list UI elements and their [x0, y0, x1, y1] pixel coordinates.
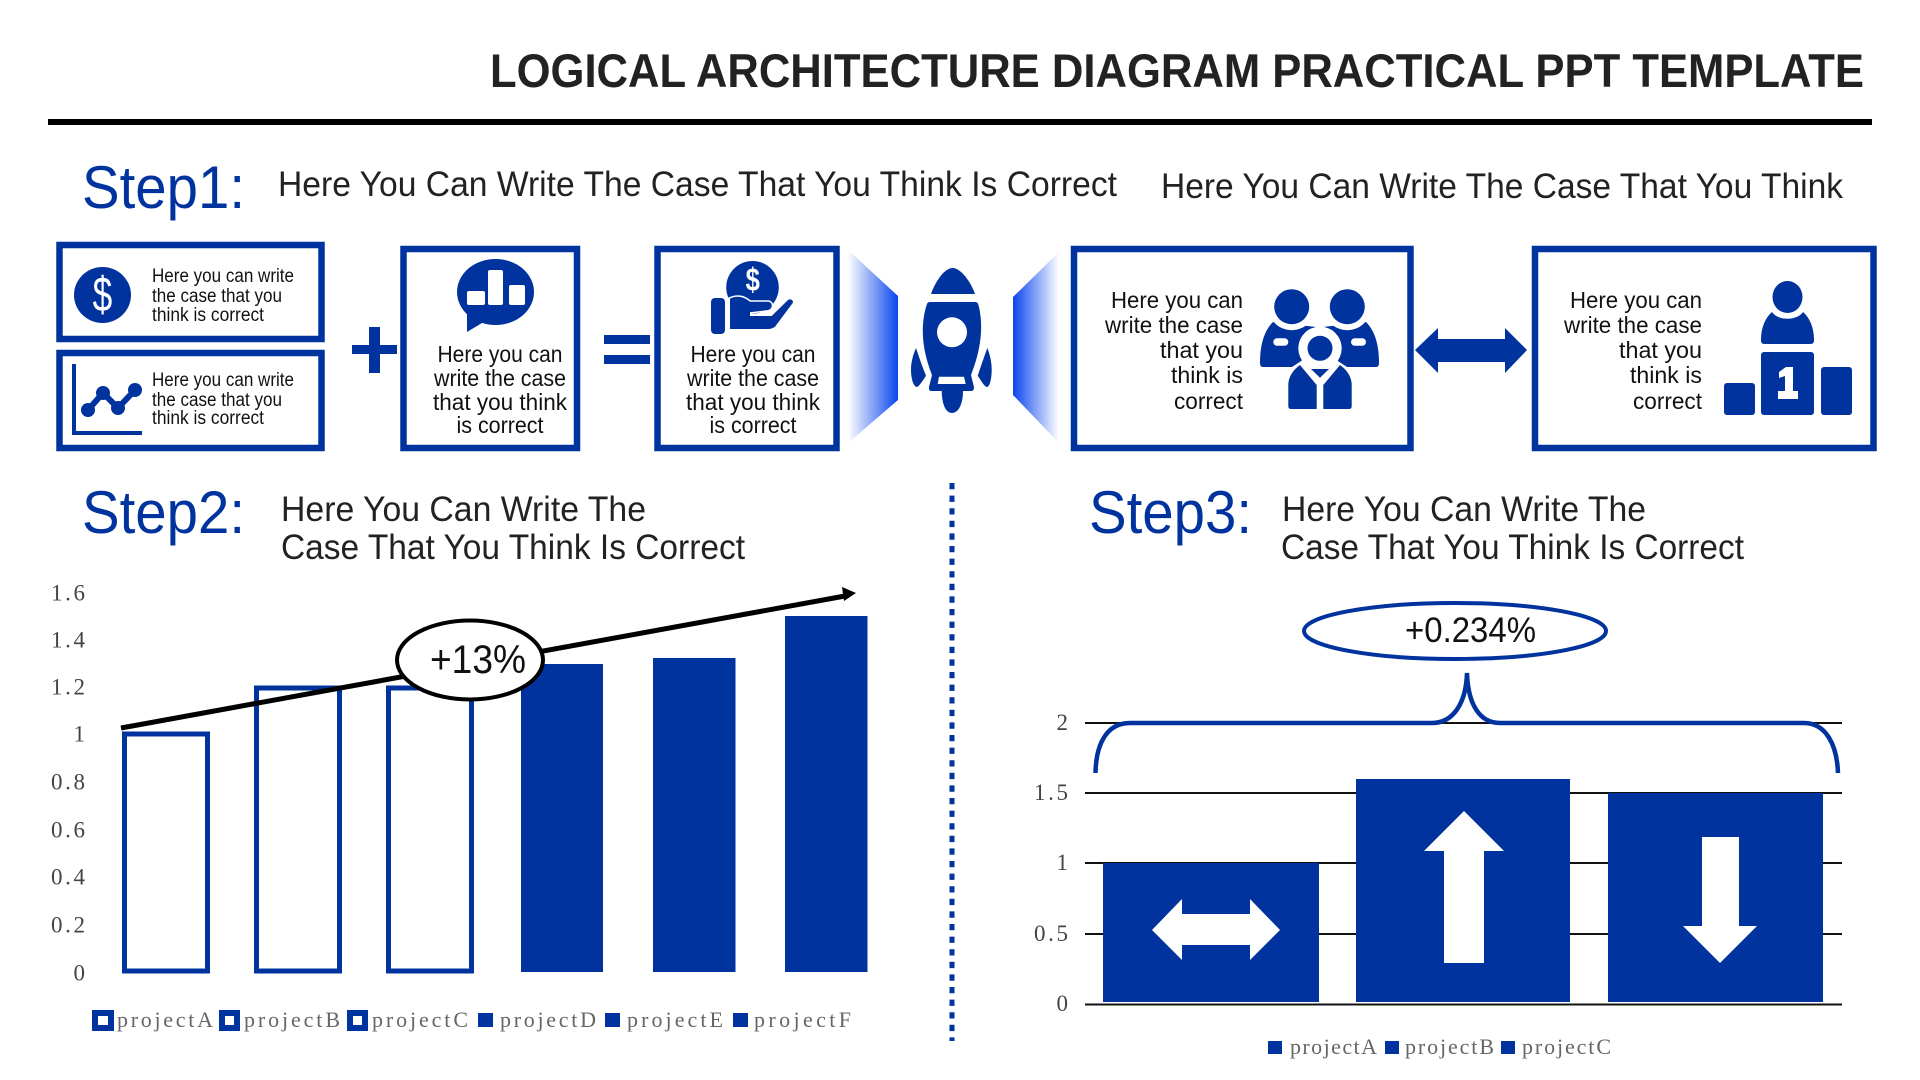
- icon: equals sign: [604, 335, 650, 364]
- heading: step 3: Step3:: [1089, 479, 1252, 546]
- right gradient trapezoid: [1013, 252, 1059, 443]
- icon: speech bubble with bars: [457, 259, 534, 332]
- legend: projectC: [372, 1007, 468, 1032]
- bar: right with down arrow: [1608, 793, 1823, 1002]
- panel: podium card: [1535, 249, 1874, 448]
- card text: Here you can: [1570, 287, 1702, 313]
- icon: rocket: [911, 268, 992, 413]
- panel: dollar card: [60, 245, 322, 339]
- card text: correct: [1174, 388, 1244, 414]
- y axis labels: 1: [1056, 850, 1068, 875]
- icon: team: [1260, 283, 1379, 409]
- step 2 description: Here You Can Write The: [281, 490, 646, 529]
- legend: projectD: [500, 1007, 596, 1032]
- icon: person on podium: [1724, 281, 1852, 415]
- card text: think is correct: [152, 305, 265, 326]
- card text: write the case: [686, 365, 819, 391]
- card text: that you think: [686, 389, 820, 415]
- card text: that you: [1619, 337, 1702, 363]
- card text: think is: [1171, 362, 1243, 388]
- y axis labels: 2: [1056, 710, 1068, 735]
- panel: speech bubble card: [404, 249, 577, 448]
- brace: [1096, 673, 1838, 773]
- callout: +0.234%: [1304, 603, 1606, 659]
- card text: Here you can write: [152, 266, 294, 287]
- card text: write the case: [433, 365, 566, 391]
- card text: the case that you: [152, 286, 282, 307]
- card text: the case that you: [152, 390, 282, 411]
- card text: write the case: [1563, 312, 1702, 338]
- step 1 description left: Here You Can Write The Case That You Think Is Correct: [278, 165, 1117, 204]
- y axis labels: 0.6: [51, 818, 85, 842]
- icon: dollar coin: $: [93, 267, 113, 322]
- y axis labels: 1.5: [1034, 780, 1068, 805]
- y axis labels: 1.6: [51, 580, 85, 606]
- card text: Here you can: [690, 341, 816, 367]
- bar chart: right: [1034, 603, 1842, 1059]
- legend: [95, 1007, 851, 1032]
- icon: dollar coin: [74, 267, 131, 323]
- card text: [152, 370, 294, 429]
- panel: line chart card: [60, 353, 322, 448]
- bars: [124, 616, 868, 972]
- card text: that you think: [433, 389, 567, 415]
- card text: Here you can write: [152, 370, 294, 391]
- step 3 description: [1281, 490, 1744, 567]
- step 3 description: Case That You Think Is Correct: [1281, 528, 1744, 567]
- card text: [152, 266, 294, 326]
- card text: that you: [1160, 337, 1243, 363]
- heading: step 1: Step1:: [82, 154, 245, 221]
- bar: middle with up arrow: [1356, 779, 1570, 1002]
- heading: step 2: Step2:: [82, 479, 245, 546]
- icon: line chart: [72, 364, 142, 435]
- callout: +0.234%: +0.234%: [1405, 611, 1536, 650]
- step 1 description right: Here You Can Write The Case That You Think: [1161, 167, 1843, 206]
- y axis labels: 0.2: [51, 912, 85, 938]
- panel: money in hand card: [658, 249, 836, 448]
- callout: +13%: +13%: [430, 638, 526, 682]
- y axis labels: 0.4: [51, 864, 86, 890]
- card text: think is correct: [152, 408, 265, 429]
- card text: is correct: [456, 412, 544, 438]
- card text: is correct: [710, 412, 797, 438]
- card text: [433, 341, 567, 438]
- y axis labels: 0.8: [51, 770, 85, 794]
- left gradient trapezoid: [848, 250, 898, 443]
- legend: projectF: [754, 1007, 851, 1032]
- y axis labels: 1: [74, 722, 85, 746]
- legend: projectE: [627, 1007, 723, 1032]
- card text: think is: [1630, 362, 1702, 388]
- y axis labels: 1.4: [51, 628, 86, 652]
- y axis labels: [51, 580, 86, 986]
- y axis labels: 0.5: [1034, 921, 1068, 946]
- y axis labels: [1034, 710, 1068, 1016]
- card text: [1104, 287, 1244, 414]
- card text: [1563, 287, 1703, 414]
- y axis labels: 0: [1056, 991, 1068, 1016]
- card text: [686, 341, 820, 438]
- panel: team card: [1074, 249, 1410, 448]
- icon: coin over hand: $: [746, 263, 760, 298]
- icon: double arrow: [1415, 328, 1527, 373]
- legend: projectC: [1522, 1034, 1611, 1059]
- y axis labels: 0: [74, 960, 85, 986]
- step 2 description: [281, 490, 745, 567]
- step 3 description: Here You Can Write The: [1282, 490, 1646, 529]
- icon: coin over hand: [711, 261, 793, 334]
- trend arrow: [121, 587, 856, 728]
- icon: plus sign: [352, 327, 397, 373]
- bar: left with double arrow: [1103, 863, 1319, 1002]
- bar chart: left: [51, 580, 868, 1032]
- card text: correct: [1633, 388, 1703, 414]
- legend: projectB: [244, 1007, 340, 1032]
- legend: projectB: [1405, 1034, 1494, 1059]
- callout: +13%: [397, 620, 543, 700]
- legend: [1268, 1034, 1611, 1059]
- card text: write the case: [1104, 312, 1243, 338]
- legend: projectA: [1290, 1034, 1377, 1059]
- y axis labels: 1.2: [51, 674, 85, 700]
- card text: Here you can: [438, 341, 562, 367]
- legend: projectA: [117, 1007, 213, 1032]
- card text: Here you can: [1111, 287, 1243, 313]
- step 2 description: Case That You Think Is Correct: [281, 528, 745, 567]
